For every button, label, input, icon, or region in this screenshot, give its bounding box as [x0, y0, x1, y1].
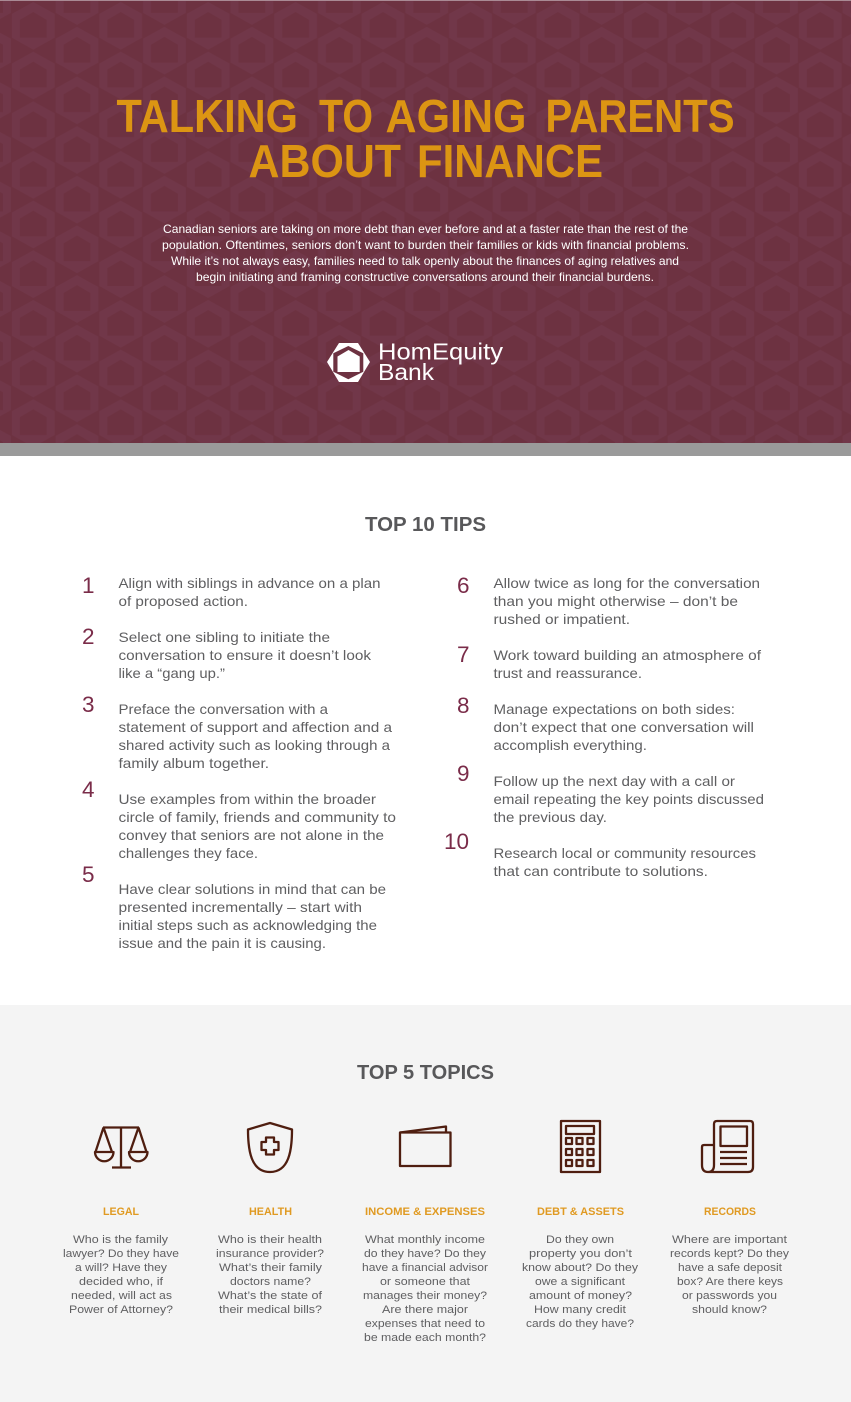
tip 9: 9	[457, 761, 470, 786]
text: income questions	[362, 1234, 488, 1344]
text: health questions: Who is their health	[218, 1234, 322, 1246]
text: legal questions: a will? Have they	[75, 1262, 167, 1274]
topic: health	[216, 1123, 324, 1316]
heading: top 5 topics: TOP 5 TOPICS	[357, 1062, 494, 1084]
text: records questions: records kept? Do they	[670, 1248, 789, 1260]
tip 7: Work toward building an atmosphere of	[494, 648, 761, 663]
tip 2: conversation to ensure it doesn’t look	[118, 648, 371, 663]
text: debt questions: cards do they have?	[526, 1318, 634, 1330]
tip 1	[82, 573, 380, 609]
text: income questions: be made each month?	[364, 1332, 486, 1344]
text: health questions	[216, 1234, 324, 1316]
icon: newspaper	[702, 1121, 753, 1172]
title	[116, 90, 734, 187]
intro paragraph: population. Oftentimes, seniors don’t want to burden their families or kids with financial problems.	[162, 239, 689, 252]
tip 9: Follow up the next day with a call or	[494, 774, 736, 789]
tip 5: Have clear solutions in mind that can be	[118, 882, 386, 897]
logo: HomEquity Bank: HomEquity	[378, 338, 503, 364]
tip 6	[457, 573, 760, 627]
icon: calculator	[561, 1121, 600, 1172]
text: records questions: have a safe deposit	[678, 1262, 783, 1274]
tip 4: circle of family, friends and community to	[118, 810, 396, 825]
title: PARENTS	[546, 90, 734, 142]
topic: records	[670, 1121, 789, 1316]
tip 9: email repeating the key points discussed	[494, 792, 764, 807]
tip 3: 3	[82, 692, 95, 717]
icon: wallet	[400, 1126, 450, 1166]
text: legal questions: decided who, if	[79, 1276, 164, 1288]
text: debt questions	[522, 1234, 638, 1330]
text: income questions: expenses that need to	[365, 1318, 485, 1330]
logo: HomEquity Bank	[327, 338, 503, 385]
tip 1: of proposed action.	[118, 594, 248, 609]
title: ABOUT	[248, 135, 401, 187]
icon: scales	[95, 1128, 148, 1168]
text: records questions: box? Are there keys	[677, 1276, 783, 1288]
tip 3: Preface the conversation with a	[118, 702, 328, 717]
label: health: HEALTH	[249, 1206, 292, 1218]
text: income questions: or someone that	[380, 1276, 471, 1288]
text: records questions: or passwords you	[682, 1290, 777, 1302]
label: legal: LEGAL	[103, 1206, 139, 1218]
text: debt questions: amount of money?	[529, 1290, 632, 1302]
text: debt questions: How many credit	[534, 1304, 627, 1316]
icon: shield with cross	[248, 1123, 292, 1172]
label: income and expenses: INCOME & EXPENSES	[365, 1206, 485, 1218]
tip 3: statement of support and affection and a	[118, 720, 392, 735]
tip 4: challenges they face.	[118, 846, 258, 861]
tip 6: than you might otherwise – don’t be	[494, 594, 738, 609]
intro paragraph	[162, 223, 689, 284]
tip 10: that can contribute to solutions.	[494, 864, 708, 879]
text: health questions: What’s the state of	[218, 1290, 323, 1302]
tip 6: rushed or impatient.	[494, 612, 630, 627]
tip 8: accomplish everything.	[494, 738, 647, 753]
tip 8: 8	[457, 693, 470, 718]
tip 10: 10	[444, 829, 469, 854]
text: debt questions: property you don’t	[529, 1248, 633, 1260]
tip 9	[457, 761, 764, 825]
tip 1: Align with siblings in advance on a plan	[118, 576, 380, 591]
intro paragraph: While it’s not always easy, families need to talk openly about the finances of aging relatives and	[171, 255, 679, 268]
text: health questions: insurance provider?	[216, 1248, 324, 1260]
tip 6: Allow twice as long for the conversation	[494, 576, 760, 591]
label: records: RECORDS	[704, 1206, 756, 1218]
tip 7: 7	[457, 642, 470, 667]
text: legal questions: Power of Attorney?	[69, 1304, 173, 1316]
text: income questions: Are there major	[382, 1304, 468, 1316]
tip 5: issue and the pain it is causing.	[118, 936, 326, 951]
tip 3: shared activity such as looking through a	[118, 738, 390, 753]
heading: top 10 tips: TOP 10 TIPS	[365, 514, 486, 536]
title: TALKING	[116, 90, 298, 142]
text: health questions: doctors name?	[230, 1276, 311, 1288]
tip 4: Use examples from within the broader	[118, 792, 377, 807]
tip 2: Select one sibling to initiate the	[118, 630, 330, 645]
text: records questions	[670, 1234, 789, 1316]
intro paragraph: Canadian seniors are taking on more debt than ever before and at a faster rate than the rest of the	[163, 223, 688, 236]
tip 8	[457, 693, 754, 753]
text: legal questions: needed, will act as	[71, 1290, 172, 1302]
topic: debt and assets	[522, 1121, 638, 1330]
panel: header banner	[0, 0, 851, 443]
tip 8: Manage expectations on both sides:	[494, 702, 735, 717]
text: records questions: should know?	[692, 1304, 767, 1316]
divider band	[0, 443, 851, 456]
tip 5	[82, 862, 386, 951]
panel: top 10 tips	[0, 456, 851, 1005]
tip 10	[444, 829, 756, 879]
title: FINANCE	[417, 135, 603, 187]
tip 7: trust and reassurance.	[494, 666, 642, 681]
topic: income and expenses	[362, 1126, 488, 1344]
tip 2	[82, 624, 371, 681]
tip 5: 5	[82, 862, 95, 887]
panel: top 5 topics	[0, 1005, 851, 1402]
text: income questions: have a financial advisor	[362, 1262, 488, 1274]
tip 7	[457, 642, 761, 681]
label: debt and assets: DEBT & ASSETS	[537, 1206, 624, 1218]
title: AGING	[386, 90, 526, 142]
tip 3	[82, 692, 392, 771]
topic: legal	[63, 1128, 179, 1316]
tip 4	[82, 777, 396, 861]
logo: HomEquity Bank: Bank	[378, 359, 434, 385]
text: income questions: do they have? Do they	[364, 1248, 486, 1260]
text: income questions: manages their money?	[363, 1290, 487, 1302]
text: records questions: Where are important	[672, 1234, 788, 1246]
intro paragraph: begin initiating and framing constructive conversations around their financial burdens.	[196, 271, 654, 284]
title: TO	[319, 90, 373, 142]
tip 6: 6	[457, 573, 470, 598]
text: health questions: What’s their family	[219, 1262, 322, 1274]
tip 5: initial steps such as acknowledging the	[118, 918, 377, 933]
tip 2: like a “gang up.”	[118, 666, 226, 681]
text: debt questions: Do they own	[546, 1234, 614, 1246]
tip 3: family album together.	[118, 756, 269, 771]
tip 1: 1	[82, 573, 95, 598]
tip 4: 4	[82, 777, 95, 802]
text: debt questions: owe a significant	[535, 1276, 626, 1288]
tip 4: convey that seniors are not alone in the	[118, 828, 384, 843]
text: legal questions: Who is the family	[73, 1234, 168, 1246]
text: legal questions: lawyer? Do they have	[63, 1248, 179, 1260]
text: health questions: their medical bills?	[219, 1304, 322, 1316]
tip 8: don’t expect that one conversation will	[494, 720, 754, 735]
tip 10: Research local or community resources	[494, 846, 756, 861]
tip 5: presented incrementally – start with	[118, 900, 362, 915]
tip 9: the previous day.	[494, 810, 607, 825]
tip 2: 2	[82, 624, 95, 649]
text: income questions: What monthly income	[365, 1234, 485, 1246]
text: debt questions: know about? Do they	[522, 1262, 638, 1274]
text: legal questions	[63, 1234, 179, 1316]
